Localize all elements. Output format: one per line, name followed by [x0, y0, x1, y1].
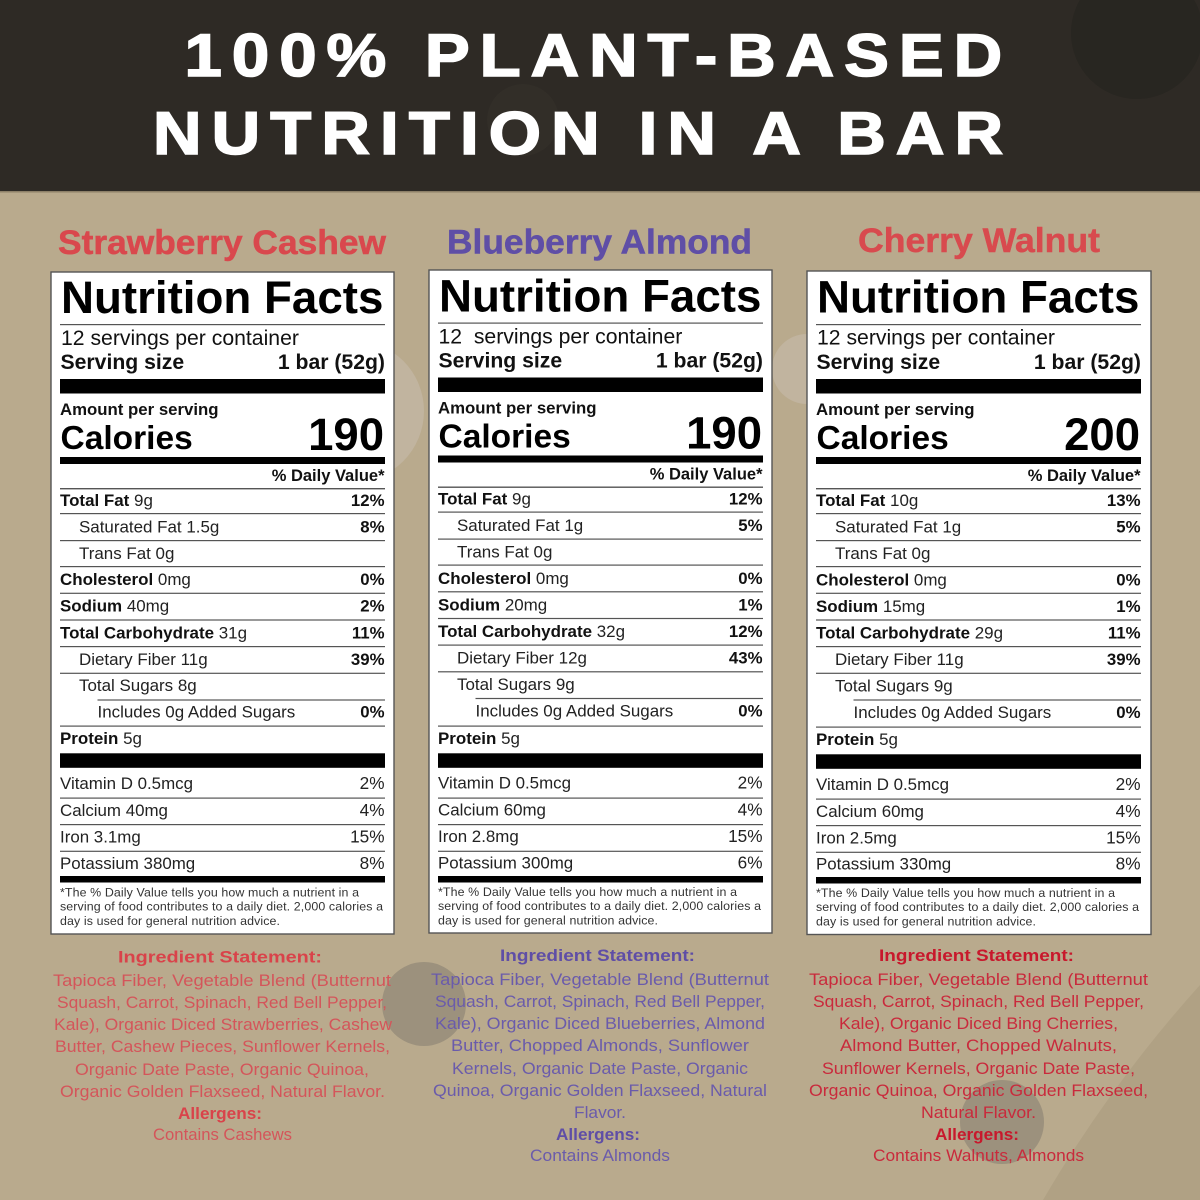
macronutrient rows: 13%	[1107, 491, 1141, 510]
ingredient statement: Strawberry Cashew	[53, 948, 392, 1144]
footnote: *The % Daily Value tells you how much a nutrient in a	[438, 885, 737, 899]
macronutrient rows: Saturated Fat 1.5g	[79, 518, 219, 536]
vitamin and mineral rows: Vitamin D 0.5mcg	[60, 774, 193, 793]
vitamin and mineral rows: 6%	[738, 852, 762, 872]
macronutrient rows	[60, 491, 385, 748]
ingredient statement: Blueberry Almond: Squash, Carrot, Spinach, Red Bell Pepper,	[435, 993, 765, 1011]
vitamin and mineral rows: Vitamin D 0.5mcg	[816, 775, 949, 794]
background decoration: dark circle right	[960, 1080, 1044, 1164]
macronutrient rows: 1%	[1116, 597, 1141, 616]
calories: 190	[686, 408, 762, 458]
vitamin and mineral rows: Calcium 60mg	[816, 802, 924, 821]
panel: Blueberry Almond nutrition facts	[429, 270, 772, 933]
ingredient statement: Cherry Walnut: Ingredient Statement:	[879, 946, 1074, 965]
serving size: 1 bar (52g)	[278, 351, 385, 374]
panel: Strawberry Cashew nutrition facts	[51, 272, 394, 934]
macronutrient rows: 11%	[1108, 624, 1141, 642]
servings per container: 12 servings per container	[438, 326, 682, 348]
title: 100% PLANT-BASED	[185, 22, 1002, 89]
ingredient statement: Cherry Walnut	[809, 946, 1149, 1165]
vitamin and mineral rows: 4%	[360, 800, 384, 820]
macronutrient rows: 39%	[1107, 650, 1141, 669]
macronutrient rows: Total Sugars 9g	[835, 676, 953, 696]
macronutrient rows: 0%	[738, 702, 763, 721]
calories	[438, 408, 762, 458]
footnote	[60, 886, 383, 928]
macronutrient rows: 0%	[738, 569, 763, 588]
footnote: serving of food contributes to a daily diet. 2,000 calories a	[60, 900, 383, 914]
footnote: day is used for general nutrition advice.	[60, 914, 280, 928]
vitamin and mineral rows: 15%	[350, 826, 384, 846]
vitamin and mineral rows: Iron 2.5mg	[816, 828, 897, 848]
ingredient statement: Strawberry Cashew: Butter, Cashew Pieces, Sunflower Kernels,	[55, 1038, 390, 1056]
title: NUTRITION IN A BAR	[153, 100, 1003, 167]
ingredient statement: Strawberry Cashew: Allergens:	[178, 1104, 262, 1123]
calories: 200	[1064, 409, 1140, 460]
ingredient statement: Blueberry Almond: Kale), Organic Diced Blueberries, Almond	[435, 1015, 765, 1033]
macronutrient rows: 8%	[360, 518, 385, 536]
serving size	[438, 350, 763, 372]
title	[153, 22, 1003, 167]
macronutrient rows: 0%	[360, 570, 385, 589]
ingredient statement: Cherry Walnut: Organic Quinoa, Organic Golden Flaxseed,	[809, 1082, 1148, 1100]
macronutrient rows: 11%	[352, 623, 385, 642]
macronutrient rows: Total Carbohydrate 32g	[438, 622, 625, 641]
vitamin and mineral rows: Calcium 40mg	[60, 801, 168, 820]
background decoration: dark circle left	[382, 962, 466, 1046]
ingredient statement: Cherry Walnut: Almond Butter, Chopped Walnuts,	[840, 1037, 1117, 1055]
background decoration: light circle left	[282, 340, 424, 482]
macronutrient rows: 12%	[351, 491, 385, 510]
macronutrient rows: Total Fat 9g	[438, 490, 531, 508]
macronutrient rows: Protein 5g	[816, 730, 898, 749]
vitamin and mineral rows: 4%	[738, 800, 762, 820]
ingredient statement: Cherry Walnut: Squash, Carrot, Spinach, Red Bell Pepper,	[813, 993, 1144, 1011]
macronutrient rows: 5%	[1116, 518, 1141, 536]
vitamin and mineral rows: 15%	[1106, 828, 1140, 848]
macronutrient rows: 2%	[360, 597, 385, 616]
ingredient statement: Strawberry Cashew: Organic Golden Flaxseed, Natural Flavor.	[60, 1083, 385, 1101]
macronutrient rows: Trans Fat 0g	[835, 544, 930, 563]
macronutrient rows: Cholesterol 0mg	[60, 570, 191, 589]
percent daily value heading: % Daily Value*	[650, 466, 763, 484]
macronutrient rows: Trans Fat 0g	[457, 542, 552, 562]
macronutrient rows: Total Carbohydrate 31g	[60, 623, 247, 642]
vitamin and mineral rows: Vitamin D 0.5mcg	[438, 774, 571, 793]
ingredient statement: Cherry Walnut: Sunflower Kernels, Organic Date Paste,	[822, 1060, 1135, 1078]
serving size: Serving size	[60, 351, 184, 374]
macronutrient rows: 1%	[738, 596, 763, 614]
macronutrient rows: Total Sugars 9g	[457, 675, 575, 694]
footnote: *The % Daily Value tells you how much a nutrient in a	[816, 886, 1115, 900]
footnote: day is used for general nutrition advice.	[816, 914, 1036, 928]
ingredient statement: Cherry Walnut: Tapioca Fiber, Vegetable Blend (Butternut	[809, 971, 1149, 989]
macronutrient rows	[816, 491, 1141, 749]
ingredient statement: Strawberry Cashew: Kale), Organic Diced Strawberries, Cashew	[54, 1016, 392, 1034]
ingredient statement: Cherry Walnut: Natural Flavor.	[921, 1104, 1036, 1122]
macronutrient rows: Protein 5g	[60, 729, 142, 748]
macronutrient rows: 12%	[729, 622, 763, 641]
background decoration: lower right arc	[1043, 985, 1200, 1200]
amount per serving: Amount per serving	[60, 400, 219, 419]
calories: Calories	[816, 420, 949, 457]
ingredient statement: Blueberry Almond: Flavor.	[574, 1104, 626, 1122]
vitamin and mineral rows: 2%	[1116, 774, 1140, 794]
macronutrient rows: 43%	[729, 648, 763, 668]
macronutrient rows: Sodium 20mg	[438, 596, 547, 614]
macronutrient rows: Dietary Fiber 11g	[835, 650, 964, 669]
macronutrient rows: Sodium 40mg	[60, 597, 169, 616]
macronutrient rows: Cholesterol 0mg	[816, 570, 947, 590]
ingredient statement: Blueberry Almond: Ingredient Statement:	[500, 946, 695, 965]
heading: Cherry Walnut: Cherry Walnut	[858, 222, 1100, 260]
macronutrient rows	[438, 490, 763, 748]
macronutrient rows: 12%	[729, 490, 763, 508]
vitamin and mineral rows: Calcium 60mg	[438, 800, 546, 820]
macronutrient rows: 5%	[738, 516, 763, 535]
percent daily value heading: % Daily Value*	[272, 467, 385, 485]
footnote: serving of food contributes to a daily diet. 2,000 calories a	[816, 900, 1139, 914]
panel: Cherry Walnut nutrition facts	[807, 271, 1151, 934]
vitamin and mineral rows	[816, 774, 1140, 874]
macronutrient rows: Dietary Fiber 11g	[79, 650, 208, 669]
macronutrient rows: Saturated Fat 1g	[457, 516, 583, 535]
vitamin and mineral rows: Potassium 380mg	[60, 854, 195, 873]
macronutrient rows: 39%	[351, 650, 385, 669]
amount per serving: Amount per serving	[816, 400, 975, 419]
vitamin and mineral rows: Iron 2.8mg	[438, 827, 519, 846]
serving size: 1 bar (52g)	[1034, 351, 1141, 374]
ingredient statement: Blueberry Almond	[431, 946, 770, 1165]
macronutrient rows: 0%	[360, 702, 385, 721]
label title: Nutrition Facts	[439, 270, 761, 322]
vitamin and mineral rows	[60, 773, 384, 873]
vitamin and mineral rows: 2%	[360, 773, 384, 793]
label title: Nutrition Facts	[61, 272, 383, 323]
vitamin and mineral rows: 2%	[738, 773, 762, 793]
macronutrient rows: Sodium 15mg	[816, 597, 925, 616]
ingredient statement: Blueberry Almond: Kernels, Organic Date Paste, Organic	[452, 1060, 748, 1078]
macronutrient rows: Trans Fat 0g	[79, 544, 174, 563]
ingredient statement: Blueberry Almond: Butter, Chopped Almonds, Sunflower	[451, 1037, 750, 1055]
vitamin and mineral rows: 8%	[360, 853, 384, 873]
calories: 190	[308, 409, 384, 460]
servings per container: 12 servings per container	[61, 327, 299, 350]
ingredient statement: Cherry Walnut: Kale), Organic Diced Bing Cherries,	[839, 1015, 1118, 1033]
macronutrient rows: Includes 0g Added Sugars	[854, 703, 1051, 722]
heading: Strawberry Cashew: Strawberry Cashew	[58, 224, 387, 262]
serving size	[60, 351, 385, 374]
amount per serving: Amount per serving	[438, 398, 597, 418]
macronutrient rows: Total Carbohydrate 29g	[816, 624, 1003, 642]
macronutrient rows: Total Fat 9g	[60, 491, 153, 510]
serving size: Serving size	[438, 350, 562, 372]
footnote: day is used for general nutrition advice.	[438, 914, 658, 928]
ingredient statement: Blueberry Almond: Contains Almonds	[530, 1147, 670, 1165]
ingredient statement: Cherry Walnut: Contains Walnuts, Almonds	[873, 1147, 1084, 1165]
macronutrient rows: Includes 0g Added Sugars	[98, 702, 295, 721]
calories	[816, 409, 1140, 460]
calories: Calories	[60, 420, 193, 457]
footnote: serving of food contributes to a daily diet. 2,000 calories a	[438, 899, 761, 913]
vitamin and mineral rows: 8%	[1116, 854, 1140, 874]
calories: Calories	[438, 418, 571, 456]
macronutrient rows: Includes 0g Added Sugars	[476, 702, 673, 721]
ingredient statement: Blueberry Almond: Quinoa, Organic Golden Flaxseed, Natural	[433, 1082, 767, 1100]
ingredient statement: Cherry Walnut: Allergens:	[935, 1125, 1019, 1144]
macronutrient rows: Protein 5g	[438, 729, 520, 748]
macronutrient rows: Total Fat 10g	[816, 491, 918, 510]
heading: Blueberry Almond: Blueberry Almond	[447, 224, 752, 262]
macronutrient rows: Cholesterol 0mg	[438, 569, 569, 588]
serving size: Serving size	[816, 351, 940, 374]
background decoration: light circle right	[772, 334, 842, 404]
ingredient statement: Strawberry Cashew: Squash, Carrot, Spinach, Red Bell Pepper,	[57, 994, 387, 1012]
vitamin and mineral rows: 15%	[728, 826, 762, 846]
ingredient statement: Strawberry Cashew: Organic Date Paste, Organic Quinoa,	[75, 1061, 369, 1079]
ingredient statement: Blueberry Almond: Tapioca Fiber, Vegetable Blend (Butternut	[431, 971, 770, 989]
vitamin and mineral rows	[438, 773, 762, 872]
calories	[60, 409, 384, 460]
footnote: *The % Daily Value tells you how much a nutrient in a	[60, 886, 359, 900]
macronutrient rows: 0%	[1116, 570, 1141, 590]
macronutrient rows: 0%	[1116, 703, 1141, 722]
footnote	[816, 886, 1139, 928]
macronutrient rows: Dietary Fiber 12g	[457, 648, 587, 668]
header band	[0, 0, 1200, 192]
serving size: 1 bar (52g)	[656, 350, 763, 372]
vitamin and mineral rows: Potassium 300mg	[438, 853, 573, 872]
ingredient statement: Strawberry Cashew: Ingredient Statement:	[118, 948, 322, 966]
vitamin and mineral rows: Potassium 330mg	[816, 854, 951, 874]
ingredient statement: Strawberry Cashew: Contains Cashews	[153, 1126, 292, 1144]
serving size	[816, 351, 1141, 374]
label title: Nutrition Facts	[817, 272, 1139, 322]
vitamin and mineral rows: Iron 3.1mg	[60, 828, 141, 846]
servings per container: 12 servings per container	[817, 326, 1055, 350]
ingredient statement: Blueberry Almond: Allergens:	[556, 1125, 640, 1144]
macronutrient rows: Total Sugars 8g	[79, 676, 197, 695]
ingredient statement: Strawberry Cashew: Tapioca Fiber, Vegetable Blend (Butternut	[53, 972, 392, 990]
macronutrient rows: Saturated Fat 1g	[835, 518, 961, 536]
footnote	[438, 885, 761, 928]
vitamin and mineral rows: 4%	[1116, 801, 1140, 821]
percent daily value heading: % Daily Value*	[1028, 467, 1141, 485]
